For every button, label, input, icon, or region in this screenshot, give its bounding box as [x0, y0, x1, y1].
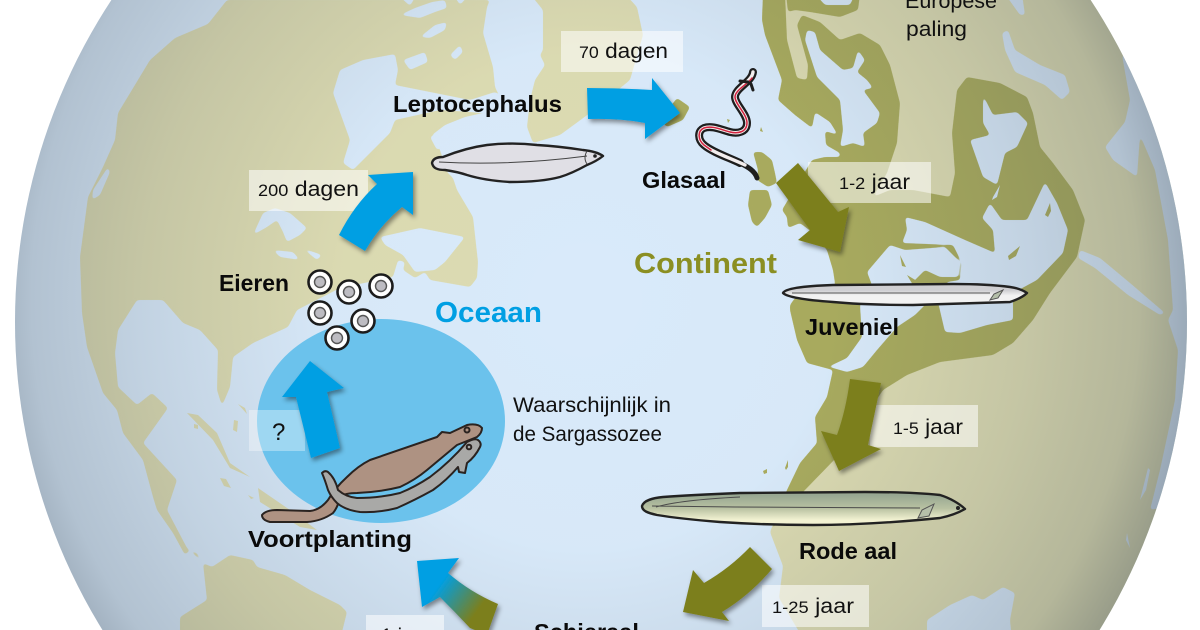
eel: red eel [642, 492, 965, 525]
label: Juveniel: Juveniel [805, 314, 899, 340]
label: unknown duration [249, 410, 305, 451]
label: 1-5 jaar: 1-5 jaar [893, 416, 963, 439]
label: 200 dagen [249, 170, 368, 211]
label: 1-5 jaar [870, 405, 978, 447]
land: Europe and Africa [762, 0, 1200, 630]
arrow: juvenile to red eel [821, 379, 881, 471]
eastern lakes and rivers [927, 0, 1200, 630]
inland seas [805, 0, 1028, 185]
label: Eieren: Eieren [219, 270, 289, 296]
Mediterranean and Black Sea [807, 182, 1068, 372]
label: 70 dagen: 70 dagen [579, 40, 668, 63]
label: 1-2 jaar: 1-2 jaar [839, 171, 910, 194]
distribution: small islands [727, 119, 788, 474]
label: 1-25 jaar: 1-25 jaar [772, 595, 854, 618]
label: 70 dagen [561, 31, 683, 72]
arrow: leptocephalus to glass eel [587, 78, 680, 139]
land: North and Central America [80, 0, 505, 563]
land: Greenland [527, 0, 643, 143]
eel: juvenile [783, 284, 1027, 305]
distribution: northern arc [786, 0, 860, 17]
distribution: British Isles, Iceland and islands [660, 98, 777, 227]
small eastern lakes [992, 185, 1150, 548]
arrow: red eel to silver eel [683, 547, 772, 621]
eels: mating pair [262, 424, 482, 522]
text: Waarschijnlijk in: Waarschijnlijk in [513, 394, 671, 417]
eel: leptocephalus [432, 144, 603, 182]
label: Continent: Continent [634, 248, 777, 280]
label: bottom duration [366, 615, 444, 630]
eel: glass eel [699, 72, 757, 178]
label: Leptocephalus: Leptocephalus [393, 91, 562, 117]
land: Hudson Bay water [333, 54, 510, 170]
land: Caribbean islands [187, 404, 317, 530]
spawning area: Sargasso Sea [257, 319, 505, 523]
eggs [308, 270, 392, 350]
land: South America [180, 555, 347, 630]
label: 1-25 jaar [762, 585, 869, 627]
arrow: glass eel to juvenile [776, 163, 849, 252]
land: arctic and inland waters [92, 0, 470, 272]
label: Oceaan: Oceaan [435, 297, 542, 329]
arrow: reproduction to eggs [282, 361, 344, 458]
label: Glasaal: Glasaal [642, 167, 726, 193]
eel distribution area [762, 0, 1085, 532]
small islands in seas [900, 203, 1051, 285]
label: unknown duration: ? [272, 419, 285, 446]
label: Rode aal: Rode aal [799, 538, 897, 564]
label: 200 dagen: 200 dagen [258, 178, 359, 201]
heading line: paling: paling [906, 18, 967, 41]
text: de Sargassozee: de Sargassozee [513, 423, 662, 446]
label: 1-2 jaar [808, 162, 931, 203]
arrow: silver eel to reproduction [417, 558, 498, 630]
label: Voortplanting: Voortplanting [248, 526, 412, 552]
arrow: eggs to leptocephalus [339, 172, 413, 251]
